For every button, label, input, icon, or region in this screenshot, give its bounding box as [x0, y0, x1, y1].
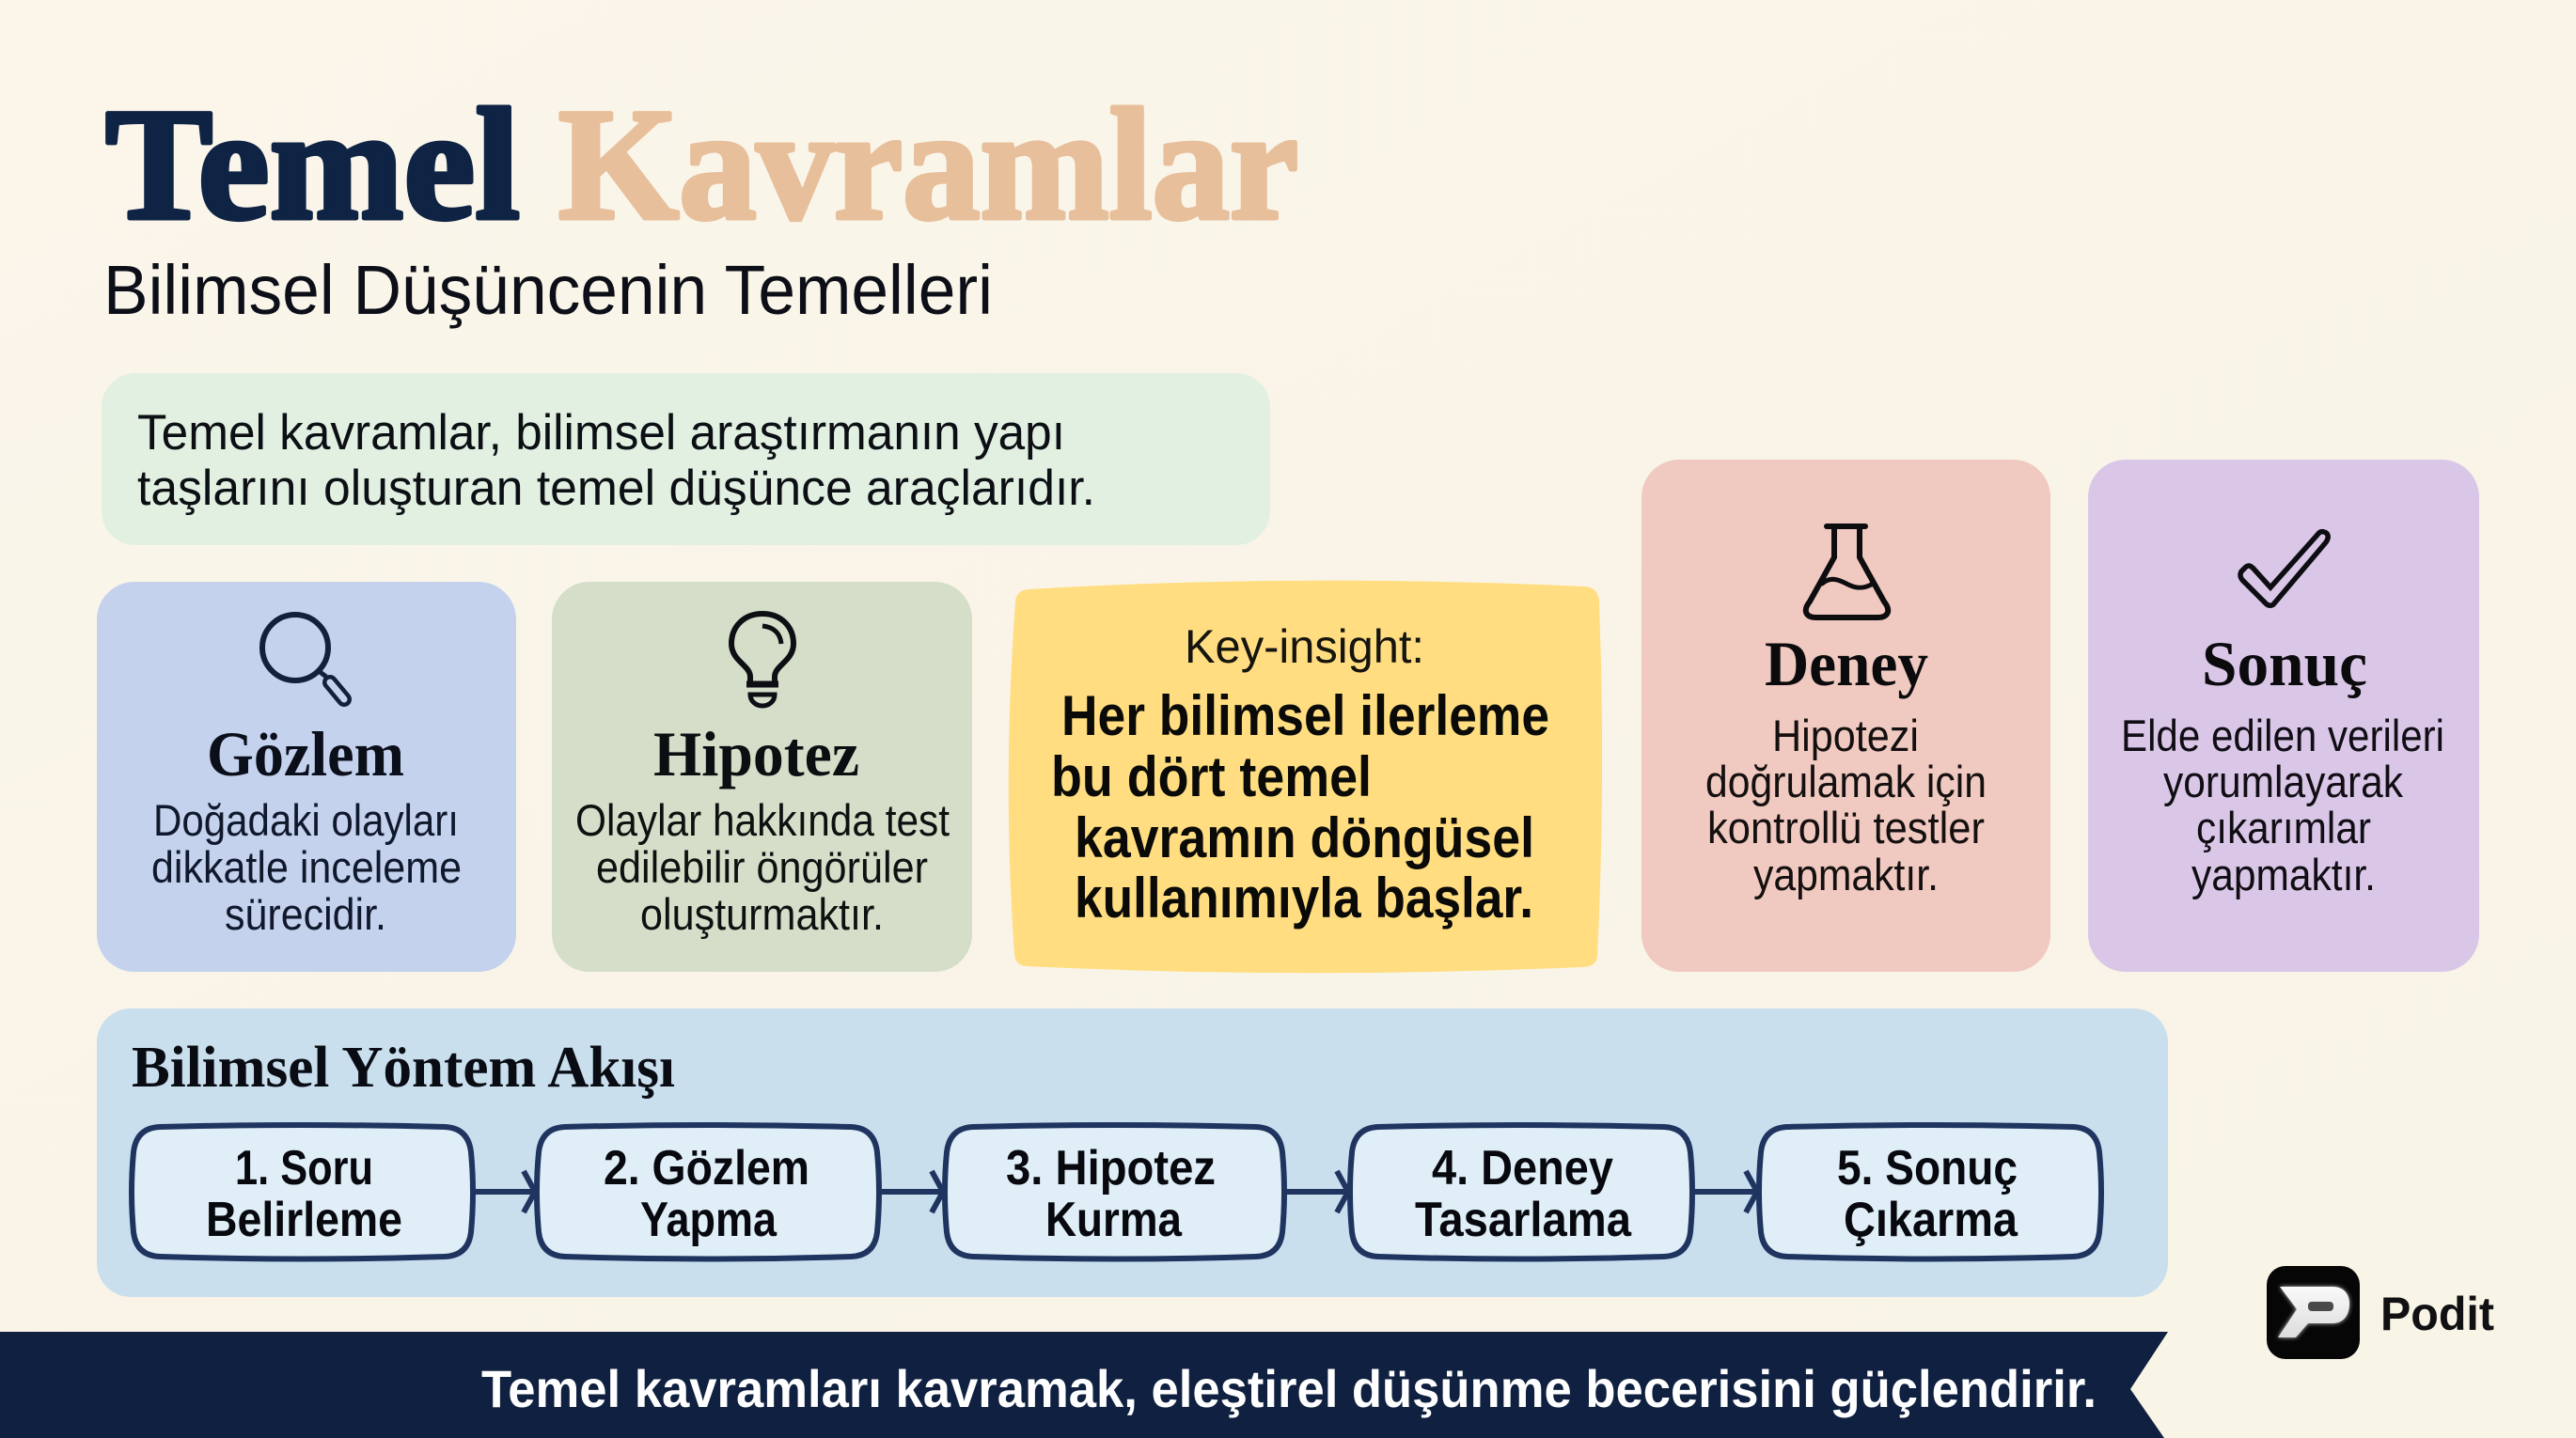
arrow 1 to 2: [473, 1171, 535, 1212]
heading: Sonuç: Sonuç: [2202, 628, 2367, 699]
callout: key insight: bu dört temel: [1051, 745, 1372, 808]
title: Kavramlar: [558, 76, 1298, 253]
heading: Deney: Deney: [1765, 628, 1928, 699]
callout: key insight: kavramın döngüsel: [1075, 806, 1534, 869]
step 3: Kurma: [1045, 1193, 1183, 1247]
description: Deney: doğrulamak için: [1705, 757, 1987, 806]
step 1: Belirleme: [206, 1193, 402, 1247]
description: Deney: yapmaktır.: [1753, 850, 1939, 899]
description: Hipotez: [575, 795, 950, 939]
description: Sonuç: yapmaktır.: [2191, 850, 2376, 899]
description: Deney: Hipotezi: [1772, 711, 1919, 760]
step 2: 2. Gözlem: [604, 1141, 809, 1196]
step 4: [1350, 1125, 1692, 1259]
step 4: 4. Deney: [1432, 1141, 1613, 1196]
icon: magnifying glass: [262, 615, 344, 699]
bottom banner: [0, 1332, 2168, 1438]
bottom banner: Temel kavramları kavramak, eleştirel düşünme becerisini güçlendirir.: [481, 1359, 2097, 1418]
intro text panel: Temel kavramlar, bilimsel araştırmanın yapı: [137, 405, 1065, 461]
step 5: 5. Sonuç: [1837, 1141, 2018, 1196]
description: Deney: [1705, 711, 1987, 899]
icon: check mark: [2240, 532, 2328, 605]
step 2: [537, 1125, 879, 1259]
panel: Hipotez: [552, 582, 972, 972]
description: Sonuç: Elde edilen verileri: [2121, 711, 2444, 760]
step 1: 1. Soru: [235, 1141, 373, 1196]
panel: Sonuç: [2088, 460, 2479, 972]
description: Gözlem: dikkatle inceleme: [151, 842, 462, 892]
title: Temel: [105, 76, 520, 253]
arrow 4 to 5: [1692, 1171, 1757, 1212]
description: Hipotez: Olaylar hakkında test: [575, 795, 950, 845]
description: Gözlem: Doğadaki olayları: [153, 795, 459, 845]
heading: Gözlem: Gözlem: [207, 718, 404, 789]
description: Sonuç: çıkarımlar: [2196, 803, 2371, 852]
description: Gözlem: [151, 795, 462, 939]
description: Gözlem: sürecidir.: [225, 889, 386, 939]
arrow 2 to 3: [879, 1171, 943, 1212]
step 1: [132, 1125, 473, 1259]
title: [105, 76, 1298, 253]
step 3: [945, 1125, 1284, 1259]
description: Hipotez: edilebilir öngörüler: [596, 842, 928, 892]
description: Sonuç: [2121, 711, 2444, 899]
step 5: [1759, 1125, 2101, 1259]
subtitle: Bilimsel Düşüncenin Temelleri: [103, 251, 993, 329]
step 2: Yapma: [640, 1193, 778, 1247]
step 3: 3. Hipotez: [1006, 1141, 1216, 1196]
arrow 3 to 4: [1284, 1171, 1348, 1212]
icon: light bulb: [731, 614, 793, 706]
heading: Hipotez: Hipotez: [653, 718, 859, 789]
callout: key insight: Key-insight:: [1185, 620, 1424, 673]
logo: Podit: [2267, 1266, 2494, 1359]
intro text panel: [102, 373, 1270, 545]
logo: Podit: Podit: [2380, 1288, 2494, 1340]
step 4: Tasarlama: [1415, 1193, 1632, 1247]
intro text panel: taşlarını oluşturan temel düşünce araçlarıdır.: [137, 461, 1095, 516]
callout: key insight: [1009, 581, 1602, 973]
panel: scientific method flow: [97, 1008, 2168, 1297]
description: Sonuç: yorumlayarak: [2163, 757, 2403, 806]
step 5: Çıkarma: [1844, 1193, 2018, 1247]
description: Deney: kontrollü testler: [1707, 803, 1985, 852]
callout: key insight: Her bilimsel ilerleme: [1061, 684, 1549, 747]
panel: Gözlem: [97, 582, 516, 972]
heading: flow: Bilimsel Yöntem Akışı: [132, 1036, 675, 1100]
panel: Deney: [1641, 460, 2050, 972]
description: Hipotez: oluşturmaktır.: [640, 889, 884, 939]
callout: key insight: kullanımıyla başlar.: [1075, 867, 1533, 930]
icon: flask: [1806, 526, 1888, 617]
